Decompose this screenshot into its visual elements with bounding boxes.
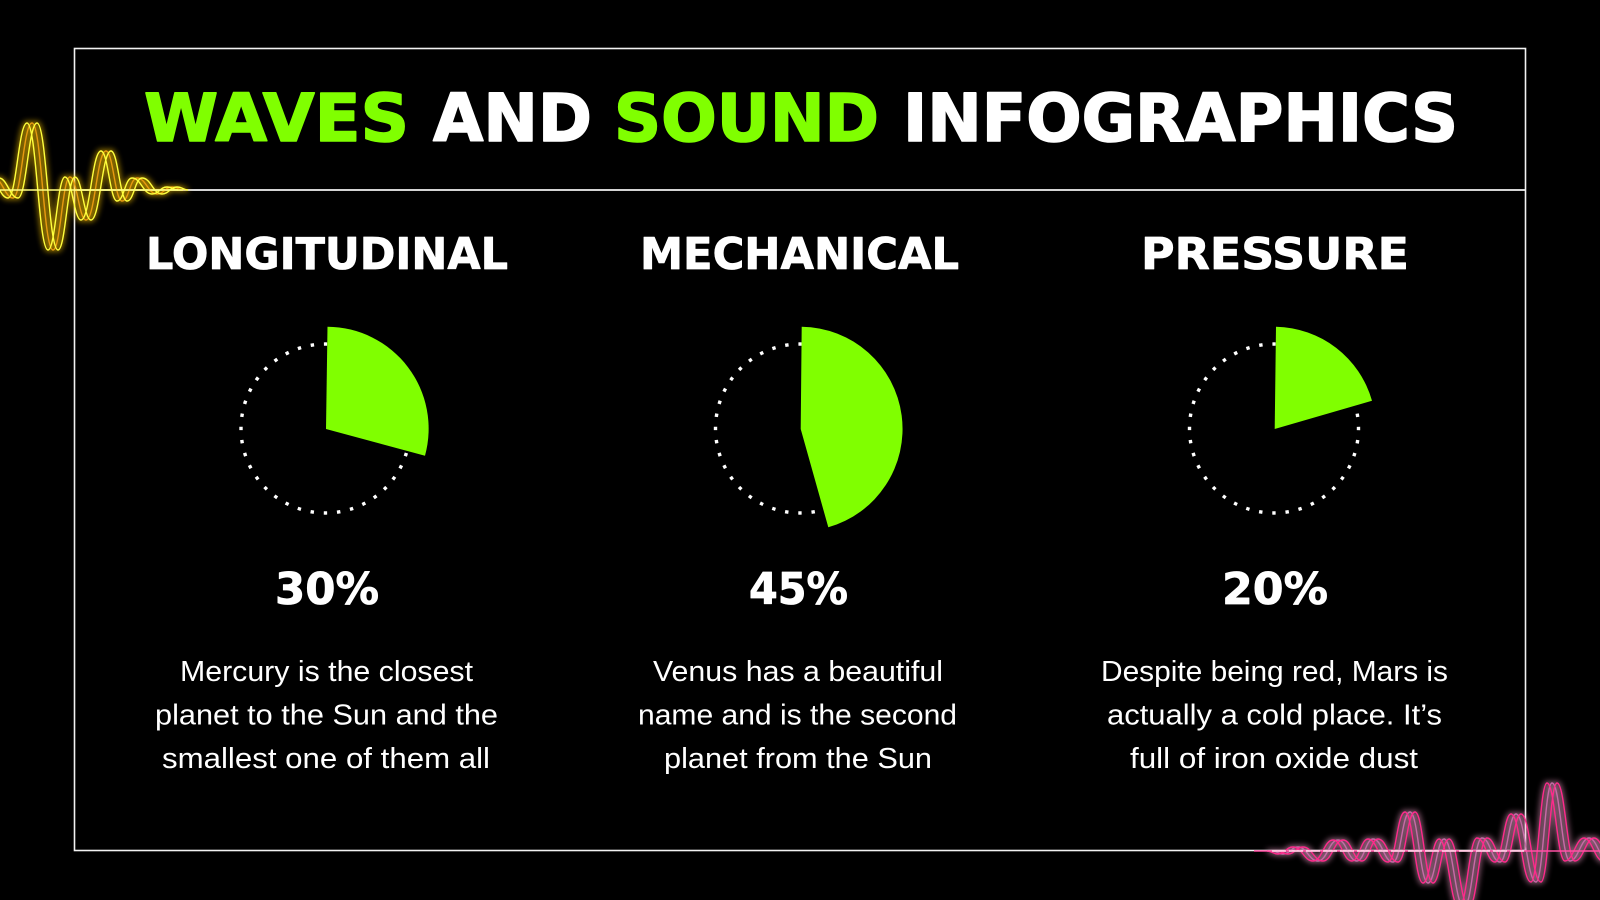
description: [155, 656, 498, 775]
heading: PRESSURE: [1141, 229, 1409, 280]
description: planet to the Sun and the: [155, 700, 498, 732]
dotted ring: [716, 344, 884, 513]
pink sound wave: [1254, 783, 1600, 900]
dotted ring: [1190, 344, 1358, 513]
pie wedge 30%: [326, 327, 429, 456]
description: Venus has a beautiful: [653, 656, 943, 688]
pie wedge 20%: [1275, 327, 1372, 429]
description: name and is the second: [638, 700, 957, 732]
header divider: [74, 189, 1526, 191]
percentage: 20%: [1222, 564, 1328, 615]
description: planet from the Sun: [664, 743, 932, 775]
panel: mechanical: [638, 229, 959, 775]
yellow sound wave: [0, 123, 188, 250]
dotted ring: [241, 344, 410, 513]
description: smallest one of them all: [162, 743, 490, 775]
title: SOUND: [614, 80, 879, 157]
description: Mercury is the closest: [180, 656, 473, 688]
description: Despite being red, Mars is: [1101, 656, 1448, 688]
heading: LONGITUDINAL: [146, 229, 508, 280]
percentage: 45%: [749, 564, 848, 615]
pie wedge 45%: [801, 327, 903, 527]
title: INFOGRAPHICS: [903, 80, 1458, 157]
description: [638, 656, 957, 775]
panel: pressure: [1101, 229, 1448, 775]
title: [144, 80, 1458, 157]
description: actually a cold place. It’s: [1107, 700, 1442, 732]
description: [1101, 656, 1448, 775]
title: WAVES: [144, 80, 409, 157]
title: AND: [433, 80, 592, 157]
panel: longitudinal: [146, 229, 508, 775]
description: full of iron oxide dust: [1130, 743, 1418, 775]
percentage: 30%: [275, 564, 379, 615]
heading: MECHANICAL: [640, 229, 959, 280]
